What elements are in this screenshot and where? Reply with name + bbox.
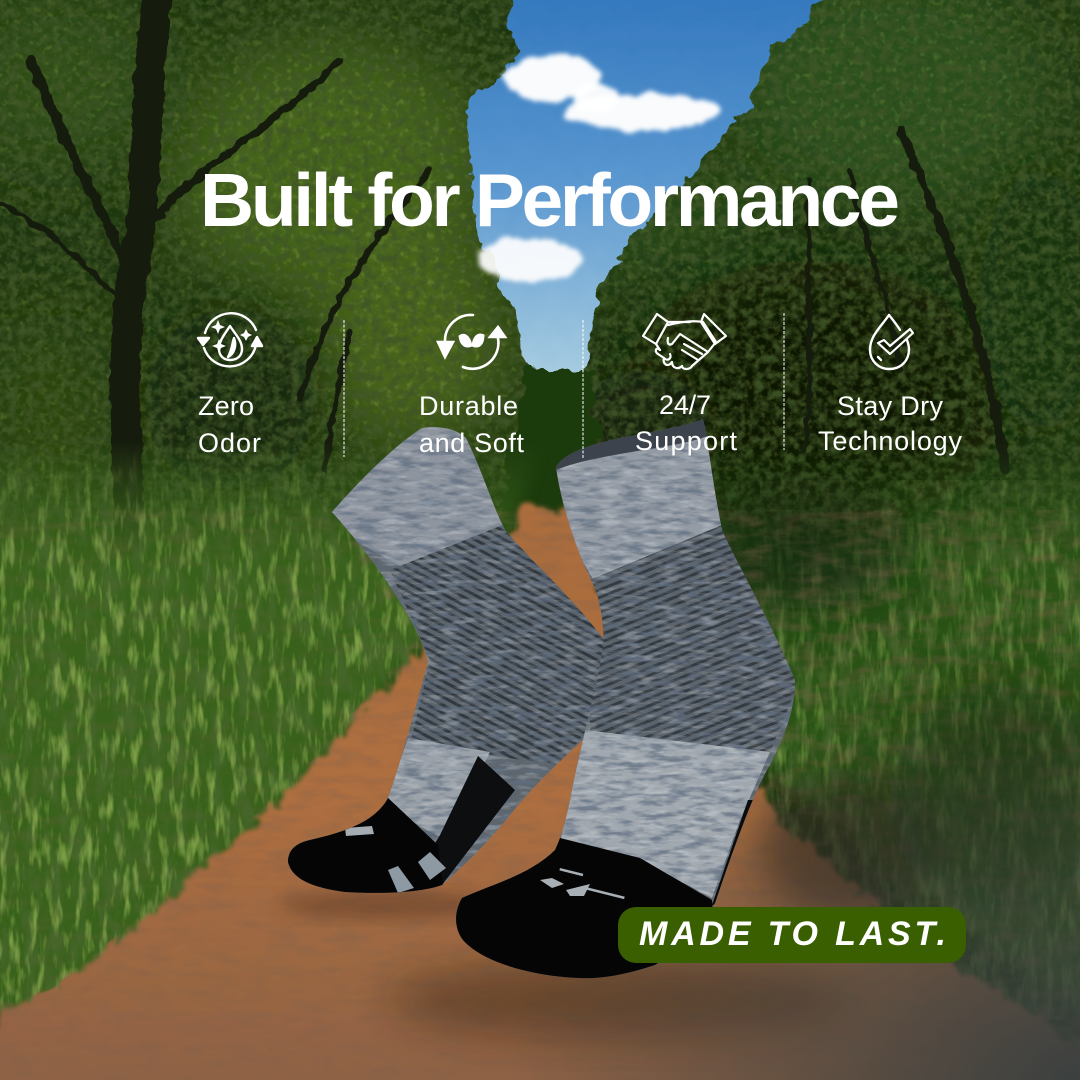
background: left tree canopy light patches	[0, 0, 505, 530]
background: foliage texture	[0, 0, 1080, 560]
icon: odor-control droplet	[198, 313, 262, 366]
background: tree trunks	[0, 0, 1005, 540]
label: and soft: and Soft	[419, 428, 524, 458]
label: zero: Zero	[198, 391, 254, 421]
background: sock shadows and bottom-right fade	[280, 680, 1080, 1080]
left sock black toe	[288, 798, 443, 893]
divider lines	[344, 313, 784, 458]
feature: stay dry	[837, 315, 944, 421]
background: left grass verge	[0, 440, 540, 1030]
label: technology: Technology	[818, 426, 962, 456]
callout: made to last: MADE TO LAST.	[639, 915, 946, 953]
left sock toe logo patches	[345, 826, 446, 893]
feature: durable and soft	[419, 315, 518, 421]
background: distant trees on the horizon	[500, 372, 610, 520]
feature: zero odor	[198, 313, 262, 421]
right sock	[450, 410, 800, 990]
label: 24/7: 24/7	[659, 390, 711, 420]
icon: recycle arrows with leaves	[438, 315, 505, 369]
title: Built for Performance	[200, 158, 900, 242]
background: grass foreground over lower-left corner	[0, 440, 420, 1010]
right sock ribbed body	[590, 526, 795, 690]
background: dirt trail	[0, 508, 1080, 1080]
right sock cuff	[550, 434, 725, 584]
left sock black heel strip	[436, 756, 515, 885]
label: durable: Durable	[419, 391, 518, 421]
right sock light band	[560, 730, 770, 898]
icon: droplet with check	[870, 315, 913, 369]
label: stay dry: Stay Dry	[837, 391, 944, 421]
background: clouds	[478, 55, 720, 282]
background: right tree canopy	[570, 0, 1080, 540]
right sock inner rim	[553, 418, 708, 470]
icon: handshake	[643, 314, 726, 369]
callout: made to last	[618, 907, 966, 963]
left sock	[280, 420, 620, 900]
left sock light band	[384, 738, 490, 840]
label: support: Support	[635, 426, 737, 456]
label: odor: Odor	[198, 428, 261, 458]
background: sky	[462, 0, 850, 372]
right sock back seam	[712, 800, 754, 905]
left sock cuff	[332, 427, 506, 566]
right sock logo	[540, 868, 625, 899]
right sock black toe	[456, 838, 712, 978]
background: right grass verge	[712, 461, 1080, 1015]
left sock ribbed body	[390, 522, 610, 765]
feature: support	[643, 314, 726, 420]
